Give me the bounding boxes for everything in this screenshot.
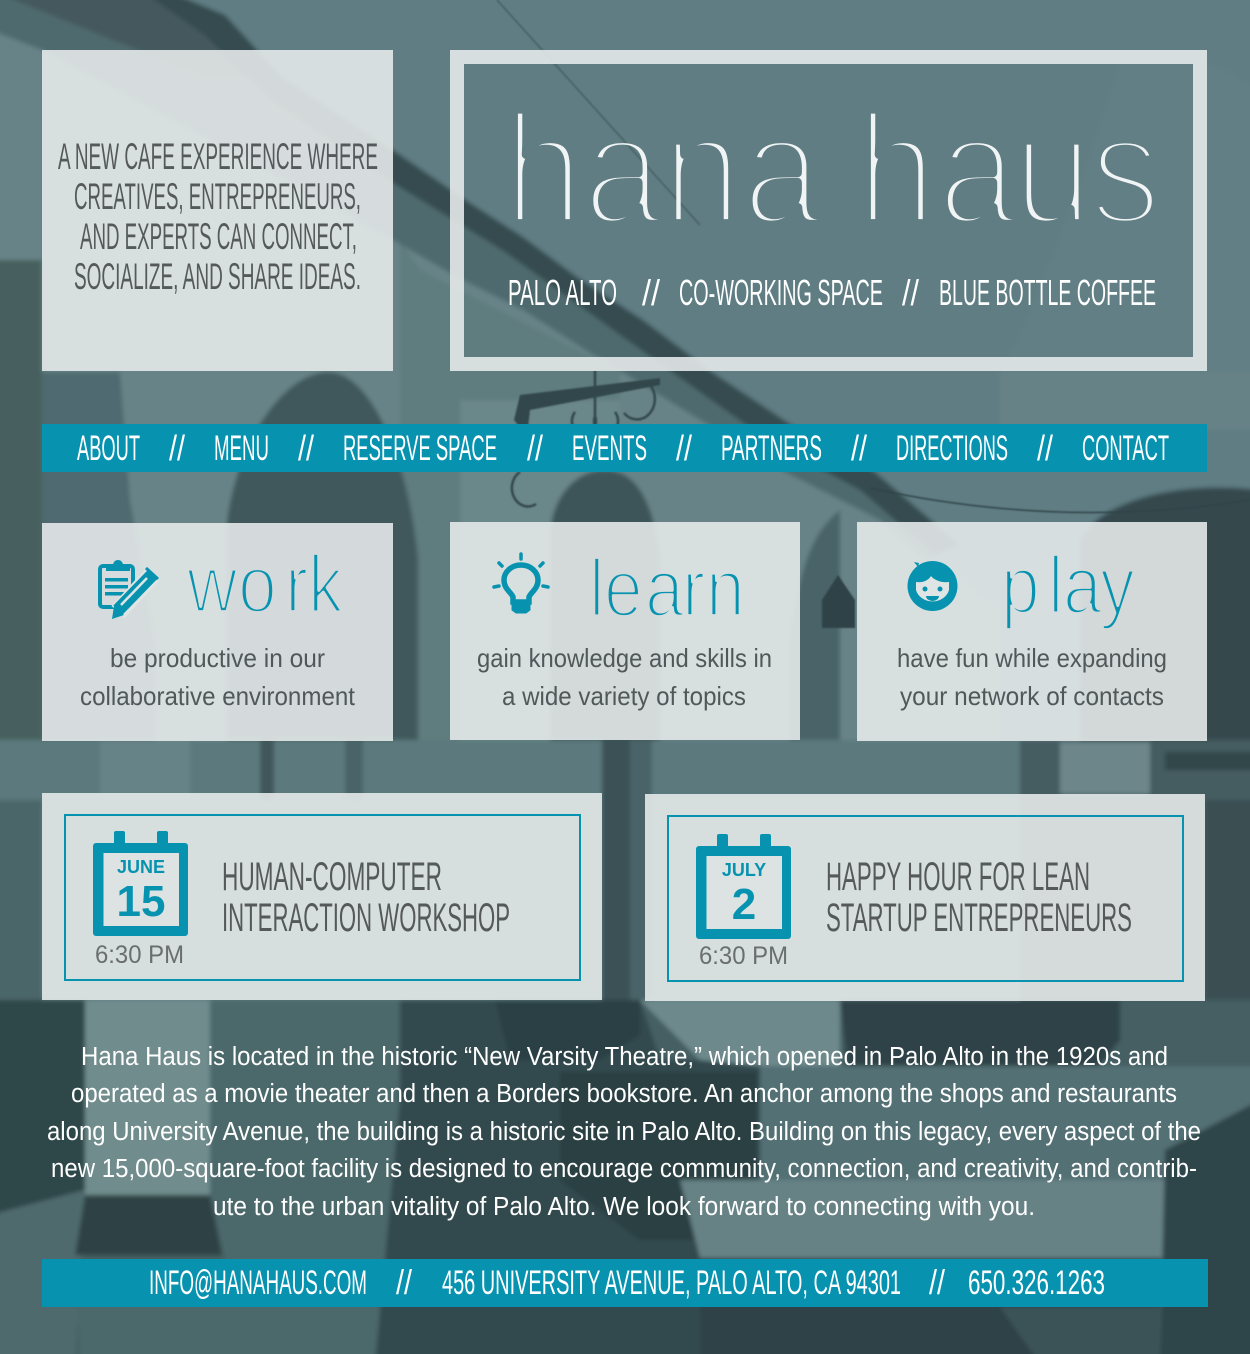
description — [477, 643, 772, 711]
lower floor and crowd — [0, 740, 1250, 1010]
navigation bar — [42, 424, 1207, 472]
text block: about paragraph: operated as a movie theater and then a Borders bookstore. An anchor among the shops and restaurants — [71, 1080, 1177, 1108]
heading: work: work — [186, 539, 344, 630]
subtitle: CO-WORKING SPACE — [679, 272, 883, 313]
event title — [826, 855, 1132, 940]
panel: event July 2 — [645, 794, 1205, 1001]
text block: about paragraph: along University Avenue, the building is a historic site in Palo Alto. Building on this legacy, every aspect of the — [47, 1118, 1201, 1146]
roof — [0, 0, 960, 560]
panel: play — [857, 522, 1207, 741]
text block: about paragraph: new 15,000-square-foot facility is designed to encourage community, connection, and creativity, and contrib- — [51, 1155, 1197, 1183]
panel: title frame — [457, 57, 1200, 364]
subtitle: // — [902, 272, 919, 313]
icon: calendar — [93, 831, 188, 936]
footer contact bar: // — [396, 1264, 412, 1302]
icon: calendar — [696, 834, 791, 939]
tagline text: AND EXPERTS CAN CONNECT, — [80, 216, 357, 257]
navigation bar: // — [527, 429, 543, 468]
tagline text — [58, 136, 378, 297]
footer contact bar: 650.326.1263 — [968, 1264, 1105, 1302]
panel: learn — [450, 522, 800, 740]
text block: about paragraph: ute to the urban vitality of Palo Alto. We look forward to connecting with you. — [213, 1193, 1035, 1221]
panel: event June 15 — [42, 793, 602, 1000]
tagline text: CREATIVES, ENTREPRENEURS, — [74, 176, 361, 217]
subtitle: // — [642, 272, 660, 313]
navigation bar: MENU — [214, 429, 269, 468]
description — [897, 643, 1167, 711]
description: a wide variety of topics — [502, 681, 746, 711]
title: hana haus — [504, 81, 1161, 257]
navigation bar: PARTNERS — [721, 429, 822, 468]
heading: learn: learn — [589, 543, 745, 634]
footer contact bar: 456 UNIVERSITY AVENUE, PALO ALTO, CA 94301 — [442, 1264, 901, 1302]
navigation bar: // — [1037, 429, 1053, 468]
heading: play: play — [1001, 540, 1135, 631]
event time: 6:30 PM — [699, 942, 788, 970]
tagline text: A NEW CAFE EXPERIENCE WHERE — [58, 136, 378, 177]
icon: calendar: JUNE — [117, 857, 165, 877]
navigation bar: // — [676, 429, 692, 468]
navigation bar: DIRECTIONS — [896, 429, 1008, 468]
icon: calendar: 15 — [117, 877, 165, 926]
wall — [0, 30, 1000, 800]
event title: INTERACTION WORKSHOP — [222, 896, 510, 940]
navigation bar: // — [169, 429, 185, 468]
navigation bar: // — [298, 429, 314, 468]
description: have fun while expanding — [897, 643, 1167, 673]
icon: light bulb — [494, 554, 548, 613]
footer contact bar — [42, 1259, 1208, 1307]
text block: about paragraph: Hana Haus is located in the historic “New Varsity Theatre,” which opened in Palo Alto in the 1920s and — [81, 1043, 1168, 1071]
description: your network of contacts — [900, 681, 1164, 711]
icon: calendar: 2 — [732, 880, 756, 929]
navigation bar: ABOUT — [77, 429, 140, 468]
arches — [0, 300, 155, 800]
icon: smiling face — [908, 561, 958, 611]
text block: about paragraph — [47, 1043, 1201, 1221]
right side — [1080, 487, 1250, 800]
icon: clipboard and pencil — [100, 560, 158, 619]
people and pillar — [0, 1000, 85, 1215]
tagline text: SOCIALIZE, AND SHARE IDEAS. — [74, 256, 361, 297]
description: collaborative environment — [80, 681, 356, 711]
navigation bar: EVENTS — [572, 429, 647, 468]
panel: work — [42, 523, 393, 741]
icon: calendar: JULY — [722, 860, 766, 880]
description: gain knowledge and skills in — [477, 643, 772, 673]
description: be productive in our — [110, 643, 325, 673]
navigation bar: CONTACT — [1082, 429, 1169, 468]
subtitle — [508, 272, 1156, 313]
background fine details: wire, lantern bracket and string lights — [497, 0, 1250, 628]
subtitle: PALO ALTO — [508, 272, 617, 313]
event time: 6:30 PM — [95, 941, 184, 969]
navigation bar: RESERVE SPACE — [343, 429, 497, 468]
footer contact bar: INFO@HANAHAUS.COM — [149, 1264, 367, 1302]
event title: HUMAN-COMPUTER — [222, 855, 442, 899]
description — [80, 643, 356, 711]
footer contact bar: // — [929, 1264, 945, 1302]
navigation bar: // — [851, 429, 867, 468]
panel: tagline — [42, 50, 393, 371]
event title — [222, 855, 510, 940]
